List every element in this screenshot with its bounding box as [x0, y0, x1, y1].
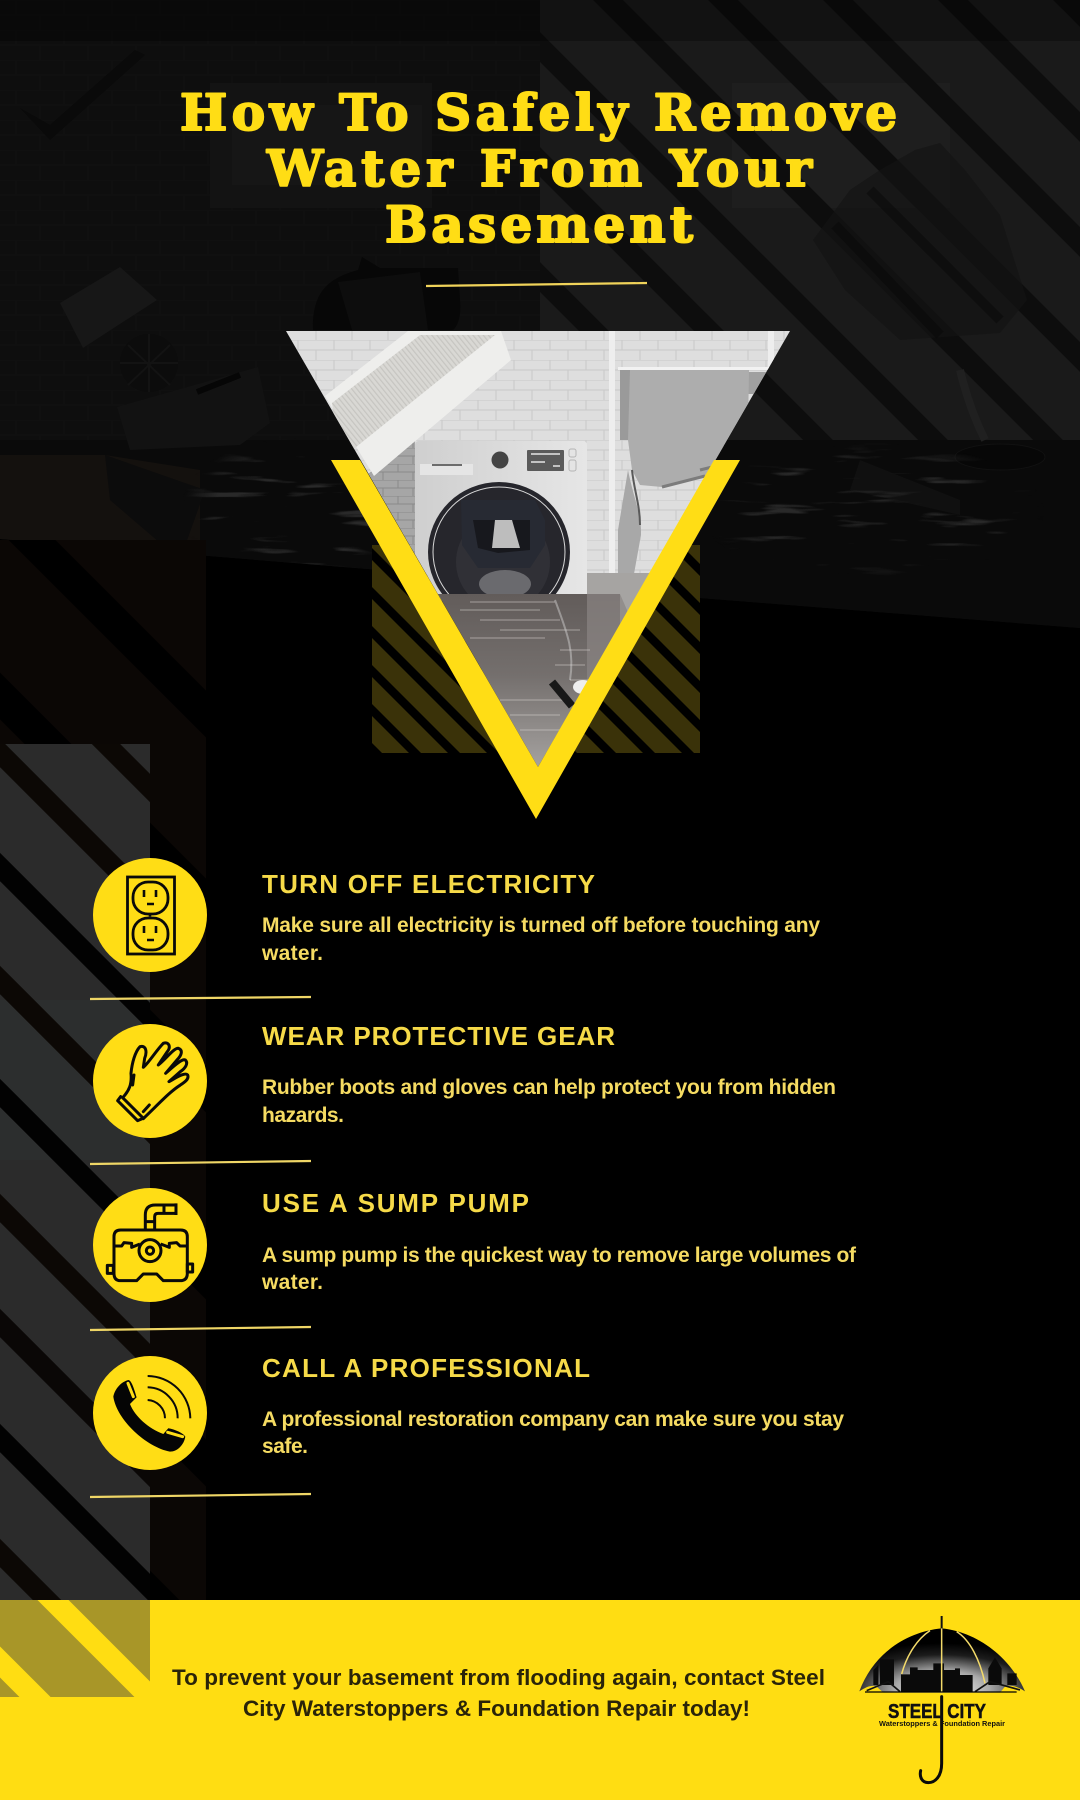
photo: wet floor behind washer	[587, 573, 650, 624]
photo: brick wall	[280, 331, 800, 601]
description: A sump pump is the quickest way to remove large volumes of	[262, 1244, 857, 1267]
title: How To Safely Remove	[180, 83, 897, 142]
footer call to action	[172, 1665, 825, 1721]
description: A professional restoration company can make sure you stay	[262, 1408, 844, 1431]
description	[262, 1076, 836, 1127]
title: Water From Your	[266, 139, 813, 198]
description: safe.	[262, 1435, 308, 1458]
footer olive striped accent	[0, 1600, 150, 1697]
yellow V shape	[331, 460, 740, 819]
row 3: use a sump pump	[93, 1188, 857, 1302]
heading: WEAR PROTECTIVE GEAR	[262, 1021, 615, 1051]
row 1: turn off electricity	[93, 858, 820, 972]
description	[261, 1244, 857, 1294]
description: water.	[261, 942, 323, 965]
title divider	[426, 283, 647, 286]
photo: washing machine	[415, 441, 587, 594]
photo: grey towel	[618, 370, 749, 585]
photo: wall pipes	[609, 331, 774, 576]
icon: electrical outlet	[93, 858, 207, 972]
row 2: wear protective gear	[93, 1021, 836, 1138]
footer band	[0, 1600, 1080, 1800]
photo: flooded laundry room in triangle	[280, 331, 800, 774]
row 4: call a professional	[93, 1353, 844, 1470]
photo: shaded lower-left wall	[368, 442, 415, 554]
heading: CALL A PROFESSIONAL	[262, 1353, 590, 1383]
description: hazards.	[262, 1104, 344, 1127]
logo: Steel City umbrella	[859, 1616, 1025, 1783]
hatched square behind photo	[372, 545, 700, 753]
icon: rubber glove	[93, 1024, 207, 1138]
logo tagline: Waterstoppers & Foundation Repair	[879, 1719, 1005, 1728]
description	[261, 914, 820, 965]
icon: sump pump	[93, 1188, 207, 1302]
footer call to action: To prevent your basement from flooding again, contact Steel	[172, 1665, 825, 1690]
description: water.	[261, 1271, 323, 1294]
title	[180, 83, 897, 254]
description: Make sure all electricity is turned off before touching any	[262, 914, 820, 937]
title: Basement	[385, 195, 693, 254]
photo: towel rail	[618, 367, 778, 440]
water ripple highlights	[194, 452, 1009, 572]
background: dim flooded room photo	[0, 0, 1080, 640]
photo: flood water	[438, 594, 628, 767]
logo wordmark: STEEL CITY	[888, 1701, 987, 1723]
icon: telephone	[93, 1356, 207, 1470]
background: dark striped left band	[0, 540, 206, 1600]
description	[262, 1408, 844, 1458]
heading: USE A SUMP PUMP	[262, 1188, 529, 1218]
photo: radiator	[325, 331, 511, 476]
background: grey striped panel	[0, 744, 150, 1600]
heading: TURN OFF ELECTRICITY	[262, 869, 595, 899]
description: Rubber boots and gloves can help protect you from hidden	[262, 1076, 836, 1099]
footer call to action: City Waterstoppers & Foundation Repair today!	[243, 1696, 750, 1721]
